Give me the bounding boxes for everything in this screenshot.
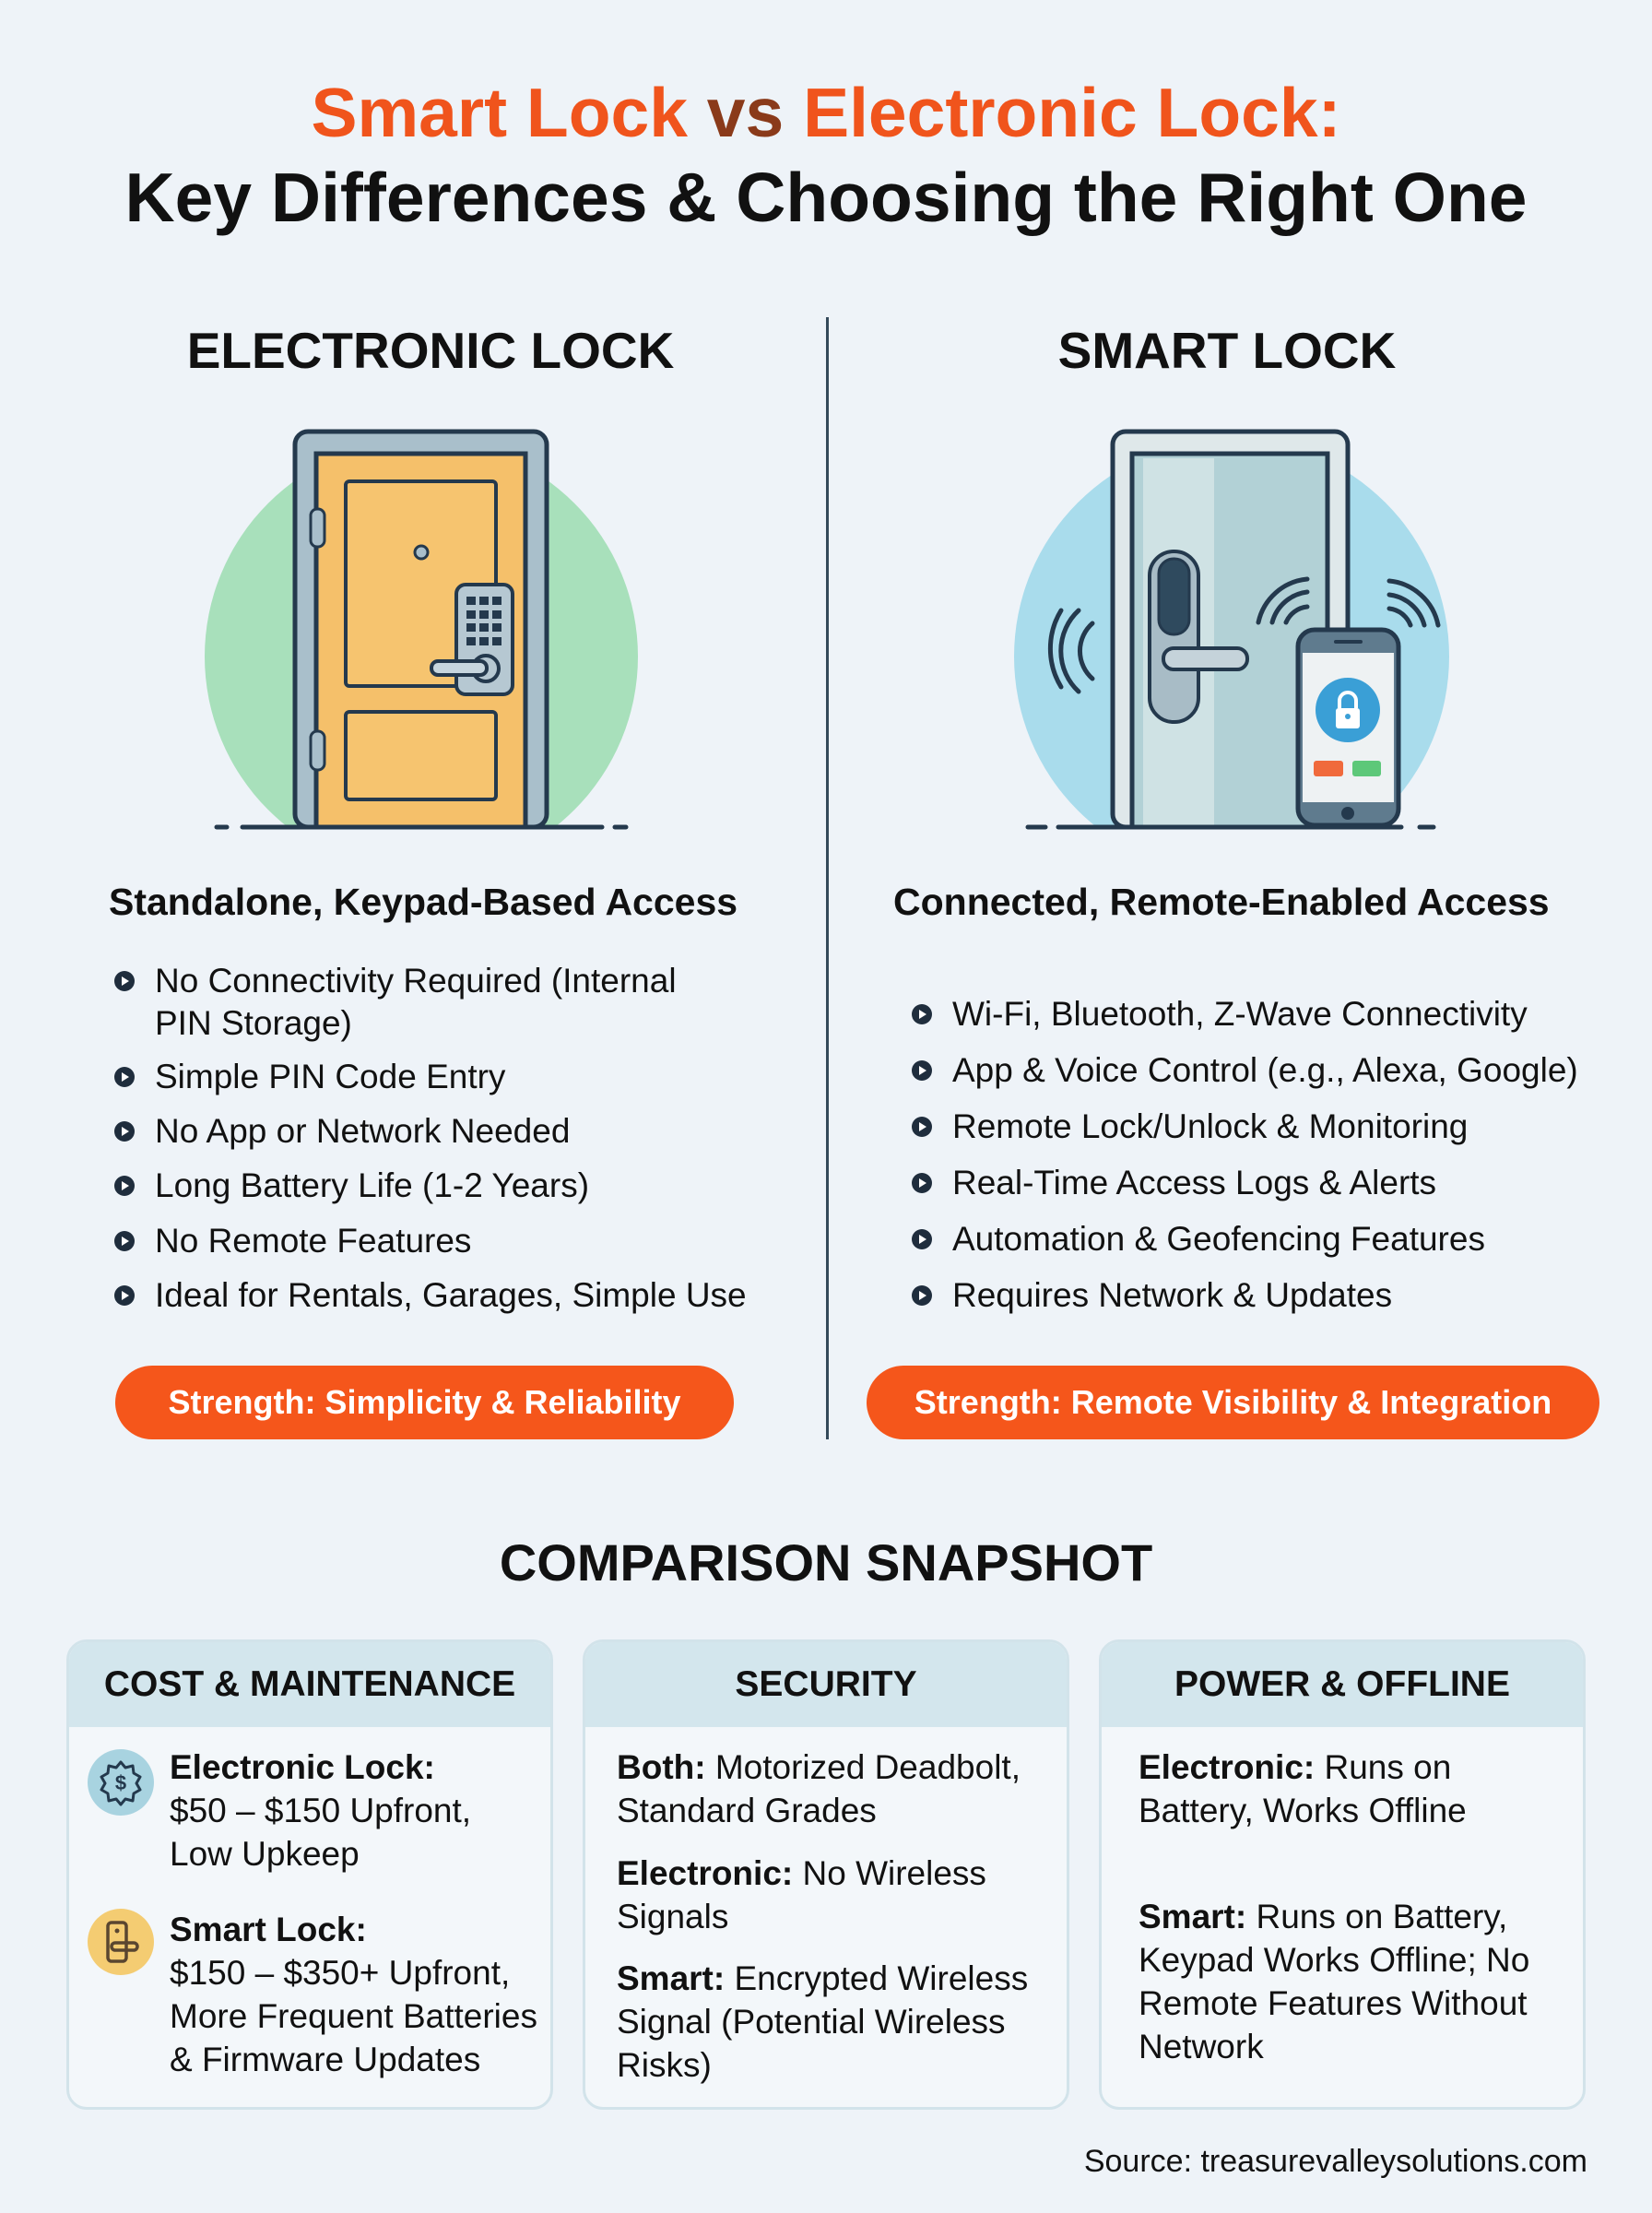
card: power & offline: POWER & OFFLINE: [1174, 1664, 1510, 1704]
card: security: Signals: [617, 1898, 728, 1935]
bullets: electronic: Long Battery Life (1-2 Years): [155, 1166, 589, 1204]
title: [124, 74, 1528, 236]
card: cost & maintenance: Electronic Lock:: [170, 1748, 435, 1786]
card: power & offline: Keypad Works Offline; No: [1139, 1941, 1529, 1979]
card: cost & maintenance: Smart Lock:: [170, 1911, 367, 1948]
heading: electronic lock: ELECTRONIC LOCK: [187, 322, 674, 379]
title: Key Differences & Choosing the Right One: [124, 159, 1528, 236]
card: security: Smart: Encrypted Wireless: [617, 1959, 1028, 1997]
bullets: smart: App & Voice Control (e.g., Alexa, Google): [952, 1051, 1578, 1089]
icon: electronic door: [205, 432, 638, 873]
bullets: electronic: [114, 962, 747, 1314]
card: cost & maintenance: [66, 1639, 553, 2110]
card: security: Signal (Potential Wireless: [617, 2003, 1006, 2041]
icon: smart door with phone: [1014, 432, 1449, 874]
card: security: SECURITY: [735, 1664, 917, 1704]
icon: dollar badge: [88, 1749, 154, 1816]
bullets: electronic: Ideal for Rentals, Garages, Simple Use: [155, 1276, 747, 1314]
card: power & offline: Battery, Works Offline: [1139, 1792, 1467, 1829]
source: Source: treasurevalleysolutions.com: [1084, 2144, 1587, 2179]
subheading: electronic: Standalone, Keypad-Based Access: [109, 881, 738, 923]
card: power & offline: Smart: Runs on Battery,: [1139, 1898, 1507, 1935]
bullets: smart: [912, 995, 1578, 1314]
icon: smart lock badge: [88, 1909, 154, 1975]
bullets: smart: Requires Network & Updates: [952, 1276, 1392, 1314]
bullets: electronic: Simple PIN Code Entry: [155, 1058, 505, 1095]
card: cost & maintenance: $50 – $150 Upfront,: [170, 1792, 471, 1829]
bullets: smart: Real-Time Access Logs & Alerts: [952, 1164, 1436, 1201]
icon: dollar badge: $: [115, 1771, 126, 1794]
card: cost & maintenance: $150 – $350+ Upfront,: [170, 1954, 510, 1992]
card: cost & maintenance: COST & MAINTENANCE: [104, 1664, 515, 1704]
pill: smart strength: [867, 1366, 1599, 1439]
divider: [826, 317, 829, 1439]
card: power & offline: Remote Features Without: [1139, 1984, 1528, 2022]
title: Smart Lock vs Electronic Lock:: [311, 74, 1341, 151]
bullets: electronic: No Remote Features: [155, 1222, 471, 1260]
card: cost & maintenance: & Firmware Updates: [170, 2041, 480, 2078]
pill: electronic strength: [115, 1366, 734, 1439]
subheading: smart: Connected, Remote-Enabled Access: [893, 881, 1550, 923]
bullets: electronic: PIN Storage): [155, 1004, 352, 1042]
card: security: Standard Grades: [617, 1792, 877, 1829]
card: security: Both: Motorized Deadbolt,: [617, 1748, 1021, 1786]
card: power & offline: Electronic: Runs on: [1139, 1748, 1451, 1786]
card: security: [583, 1639, 1069, 2110]
bullets: electronic: No App or Network Needed: [155, 1112, 570, 1150]
card: cost & maintenance: Low Upkeep: [170, 1835, 360, 1873]
card: security: Electronic: No Wireless: [617, 1854, 986, 1892]
card: power & offline: [1099, 1639, 1586, 2110]
bullets: smart: Wi-Fi, Bluetooth, Z-Wave Connectivity: [952, 995, 1528, 1033]
heading: smart lock: SMART LOCK: [1058, 322, 1396, 379]
bullets: smart: Automation & Geofencing Features: [952, 1220, 1485, 1258]
card: security: Risks): [617, 2046, 712, 2084]
pill: smart strength: Strength: Remote Visibility & Integration: [914, 1383, 1552, 1421]
card: power & offline: Network: [1139, 2028, 1264, 2065]
card: cost & maintenance: More Frequent Batteries: [170, 1997, 537, 2035]
heading: comparison snapshot: COMPARISON SNAPSHOT: [500, 1533, 1152, 1592]
pill: electronic strength: Strength: Simplicity & Reliability: [168, 1383, 681, 1421]
bullets: smart: Remote Lock/Unlock & Monitoring: [952, 1107, 1468, 1145]
bullets: electronic: No Connectivity Required (Internal: [155, 962, 677, 1000]
